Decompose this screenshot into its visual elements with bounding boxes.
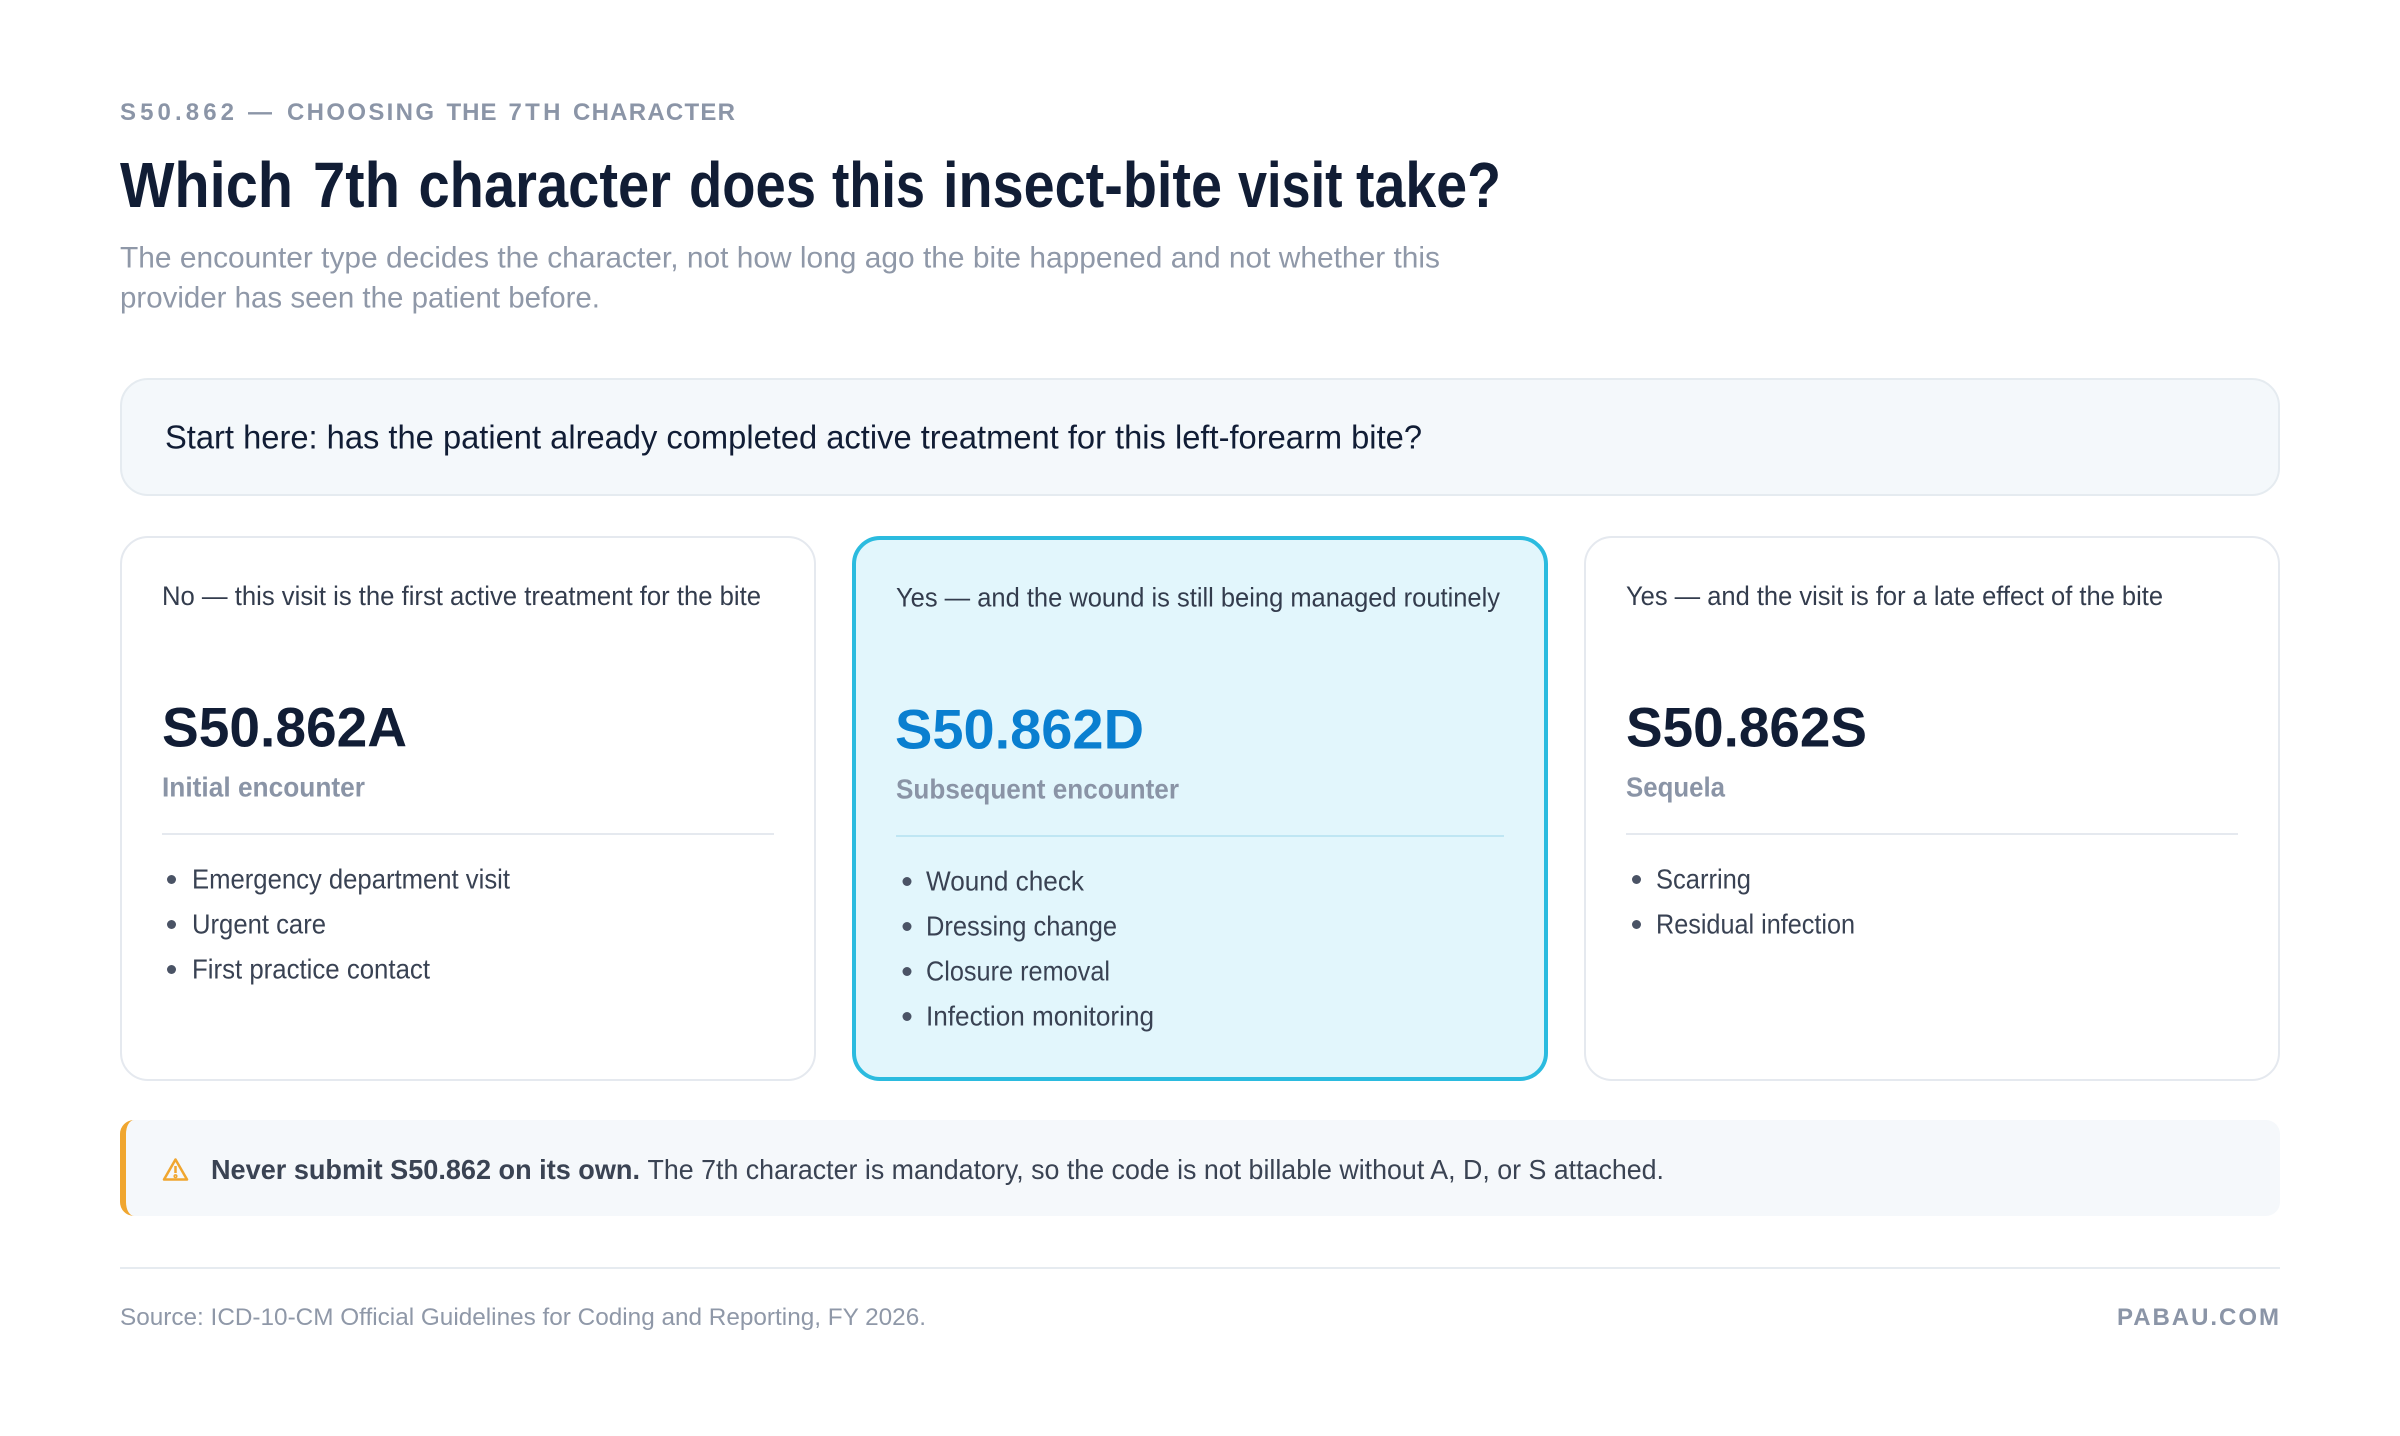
eyebrow: CHOOSING <box>287 99 434 126</box>
source: Source: ICD-10-CM Official Guidelines for Coding and Reporting, FY 2026. <box>120 1304 926 1331</box>
list: First practice contact <box>192 954 430 984</box>
list <box>902 866 1154 1032</box>
subtitle <box>120 242 1440 314</box>
code: S50.862A <box>162 696 407 758</box>
condition: Yes — and the wound is still being managed routinely <box>896 582 1500 612</box>
title: visit <box>1238 149 1342 221</box>
list <box>167 864 510 984</box>
title: Which <box>120 149 293 221</box>
encounter label: Subsequent encounter <box>896 774 1179 804</box>
panel: initial encounter <box>121 537 815 1080</box>
list <box>1632 864 1855 940</box>
condition: No — this visit is the first active treatment for the bite <box>162 581 761 611</box>
icon: warning triangle <box>164 1160 187 1180</box>
list: Emergency department visit <box>192 864 510 894</box>
panel: sequela <box>1585 537 2279 1080</box>
callout <box>120 1120 2280 1216</box>
encounter label: Sequela <box>1626 772 1725 802</box>
brand: PABAU.COM <box>2117 1304 2279 1331</box>
panel: subsequent encounter (highlighted) <box>854 538 1546 1079</box>
callout text: Never submit S50.862 on its own. <box>211 1154 640 1185</box>
subtitle: The encounter type decides the character, not how long ago the bite happened and not whether this <box>120 242 1440 274</box>
list: Urgent care <box>192 908 326 940</box>
question banner: Start here: has the patient already completed active treatment for this left-forearm bite? <box>165 418 1422 456</box>
callout text: The 7th character is mandatory, so the code is not billable without A, D, or S attached. <box>648 1154 1664 1185</box>
subtitle: provider has seen the patient before. <box>120 282 600 314</box>
eyebrow: CHARACTER <box>573 99 735 126</box>
title: take? <box>1356 149 1501 221</box>
list: Infection monitoring <box>926 1000 1154 1032</box>
list: Scarring <box>1656 864 1751 894</box>
eyebrow: — <box>248 99 272 126</box>
list: Wound check <box>926 866 1085 896</box>
code: S50.862D <box>895 698 1144 760</box>
title: this <box>832 149 925 221</box>
title: 7th <box>313 149 400 221</box>
title: character <box>418 149 671 221</box>
condition: Yes — and the visit is for a late effect of the bite <box>1626 581 2163 611</box>
list: Residual infection <box>1656 908 1855 940</box>
list: Dressing change <box>926 910 1117 942</box>
title: insect-bite <box>943 149 1222 221</box>
eyebrow: S50.862 <box>120 99 234 126</box>
eyebrow: THE <box>446 99 496 126</box>
title: does <box>689 149 816 221</box>
question banner <box>121 379 2279 495</box>
eyebrow: 7TH <box>508 99 560 126</box>
list: Closure removal <box>926 956 1110 986</box>
code: S50.862S <box>1626 696 1867 758</box>
encounter label: Initial encounter <box>162 772 365 802</box>
